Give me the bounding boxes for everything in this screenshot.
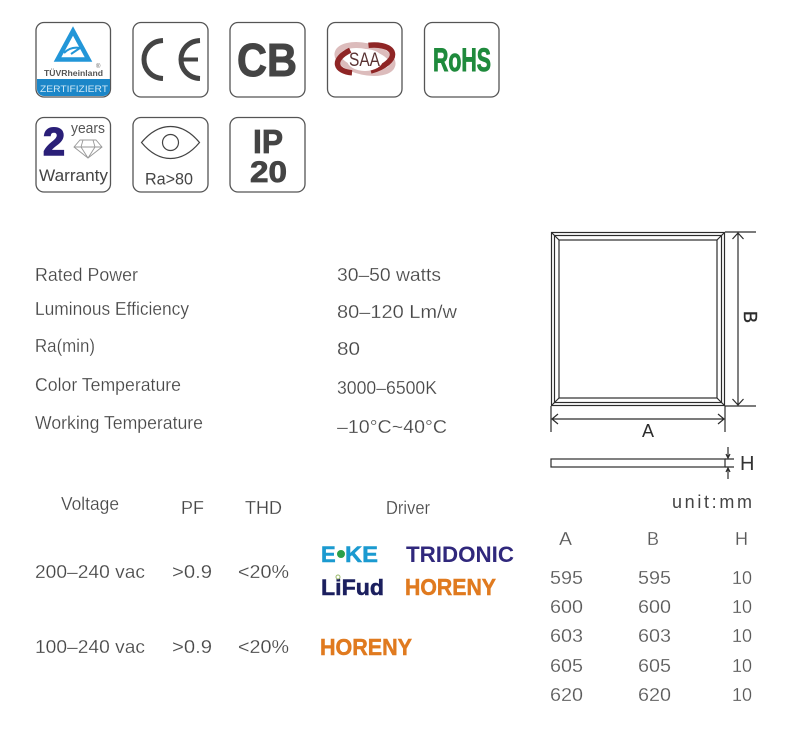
icon: CB mark: CB [237, 34, 297, 86]
panel dimension drawing: A [642, 421, 654, 441]
driver table: Driver [386, 498, 430, 518]
specification list: 80–120 Lm/w [337, 302, 458, 322]
dimension table: 10 [732, 597, 752, 617]
icon: TUV Rheinland certification: ® [96, 63, 101, 70]
panel dimension drawing [551, 232, 760, 512]
dimension table: B [647, 529, 659, 549]
driver table: 100–240 vac [35, 637, 145, 657]
driver logos: LiFud [321, 575, 384, 600]
icon: 2 years warranty: Warranty [39, 166, 109, 185]
panel dimension drawing: B [740, 311, 760, 323]
specification list: Working Temperature [35, 413, 203, 433]
icon: eye Ra>80 [133, 118, 208, 192]
icon: 2 years warranty: 2 [43, 121, 65, 164]
panel dimension drawing: H [740, 453, 754, 475]
driver table: Voltage [61, 494, 119, 514]
specification list [35, 265, 458, 437]
dimension table: 603 [638, 626, 671, 646]
icon: eye Ra>80: Ra>80 [145, 170, 193, 188]
dimension table: 10 [732, 568, 752, 588]
icon: TUV Rheinland certification [36, 22, 110, 97]
dimension table: 595 [550, 568, 583, 588]
icon: RoHS mark: RoHS [433, 42, 491, 78]
dimension table: 10 [732, 656, 752, 676]
icon: CE mark [133, 22, 208, 97]
specification list: –10°C~40°C [337, 417, 447, 437]
dimension table: H [735, 529, 748, 549]
driver logos: HORENY [405, 574, 496, 600]
dimension table: 603 [550, 626, 583, 646]
driver table: THD [245, 498, 282, 518]
driver table: PF [181, 498, 204, 518]
driver table: <20% [238, 562, 289, 582]
specification list: 80 [337, 339, 360, 359]
panel dimension drawing: unit:mm [672, 492, 752, 512]
dimension table: 605 [638, 656, 671, 676]
icon: 2 years warranty: years [71, 120, 105, 137]
dimension table: 600 [638, 597, 671, 617]
driver logos: TRIDONIC [406, 542, 514, 567]
driver logos [320, 542, 514, 660]
specification list: Color Temperature [35, 375, 181, 395]
driver logos: KE [345, 542, 378, 567]
dimension table: 10 [732, 685, 752, 705]
driver logos: HORENY [320, 634, 412, 660]
icon: CB mark [230, 22, 305, 97]
icon: SAA mark [328, 22, 402, 97]
specification list: Rated Power [35, 265, 138, 285]
driver logos: E [321, 542, 336, 567]
specification list: Ra(min) [35, 336, 95, 356]
driver table: <20% [238, 637, 289, 657]
icon: SAA mark: SAA [349, 50, 380, 71]
dimension table: 600 [550, 597, 583, 617]
specification list: Luminous Efficiency [35, 299, 189, 319]
icon: IP20: 20 [250, 156, 287, 189]
dimension table: 620 [550, 685, 583, 705]
driver table: 200–240 vac [35, 562, 145, 582]
specification list: 3000–6500K [337, 378, 437, 398]
icon: IP20: IP [253, 123, 283, 160]
dimension table: 595 [638, 568, 671, 588]
dimension table: A [559, 529, 572, 549]
dimension table: 605 [550, 656, 583, 676]
specification list: 30–50 watts [337, 265, 441, 285]
icon: TUV Rheinland certification: TÜVRheinland [44, 69, 103, 78]
dimension table: 620 [638, 685, 671, 705]
dimension table [550, 529, 752, 705]
icon: 2 years warranty [36, 118, 110, 192]
driver table: >0.9 [172, 637, 212, 657]
icon: RoHS mark [424, 22, 499, 97]
driver table [35, 494, 430, 657]
icon: TUV Rheinland certification: ZERTIFIZIERT [40, 84, 108, 95]
dimension table: 10 [732, 626, 752, 646]
icon: IP20 [230, 118, 305, 192]
driver table: >0.9 [172, 562, 212, 582]
